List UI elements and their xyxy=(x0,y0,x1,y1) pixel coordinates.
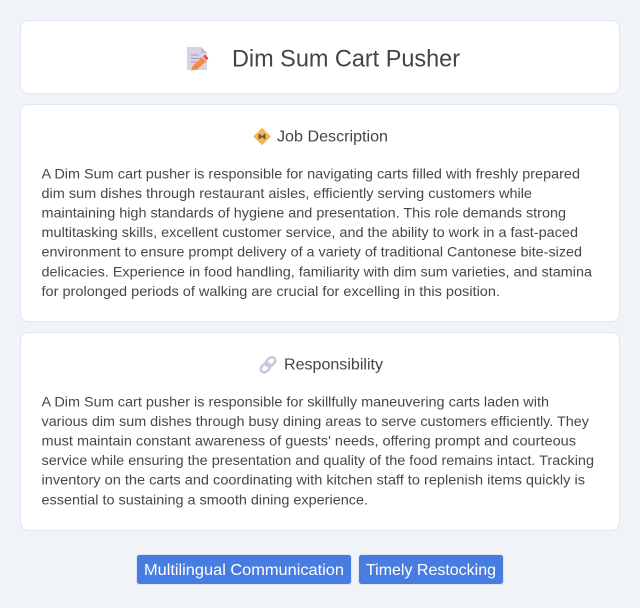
heading: job description: Job Description xyxy=(277,128,388,145)
icon: chain link xyxy=(259,356,277,374)
text block: job description body: A Dim Sum cart pusher is responsible for navigating carts filled with freshly prepared xyxy=(42,165,580,181)
text block: job description body: multitasking skills, excellent customer service, and the ability to work in a fast-paced xyxy=(42,224,578,240)
text block: job description body: delicacies. Experience in food handling, familiarity with dim sum varieties, and stamina xyxy=(42,263,592,279)
text block: responsibility body: must maintain constant awareness of guests' needs, offering prompt and courteous xyxy=(42,432,576,448)
tag: timely restocking: Timely Restocking xyxy=(366,562,496,579)
text block: responsibility body: service while ensuring the presentation and quality of the food remains intact. Tracking xyxy=(42,452,594,468)
icon: document with pencil xyxy=(187,47,208,70)
panel: responsibility xyxy=(20,332,620,530)
tag: timely restocking xyxy=(358,554,504,584)
title: Dim Sum Cart Pusher xyxy=(232,45,460,72)
text block: responsibility body xyxy=(42,393,594,507)
text block: responsibility body: essential to sustaining a smooth dining experience. xyxy=(42,491,368,507)
text block: job description body: environment to ensure prompt delivery of a variety of traditional Cantonese bite-sized xyxy=(42,244,582,260)
text block: job description body: maintaining high standards of hygiene and presentation. This role demands strong xyxy=(42,204,566,220)
panel: job description xyxy=(20,104,620,322)
heading: responsibility: Responsibility xyxy=(284,356,383,373)
text block: responsibility body: inventory on the carts and coordinating with kitchen staff to replenish items quickly is xyxy=(42,472,585,488)
text block: responsibility body: various dim sum dishes through busy dining areas to serve customers efficiently. They xyxy=(42,413,589,429)
icon: orange diamond xyxy=(254,128,270,144)
text block: job description body: for prolonged periods of walking are crucial for excelling in this position. xyxy=(42,283,500,299)
text block: responsibility body: A Dim Sum cart pusher is responsible for skillfully maneuvering carts laden with xyxy=(42,393,549,409)
tag: multilingual communication: Multilingual Communication xyxy=(144,562,344,579)
text block: job description body: dim sum dishes through restaurant aisles, efficiently serving customers while xyxy=(42,185,532,201)
text block: job description body xyxy=(42,165,592,299)
tag: multilingual communication xyxy=(136,554,352,584)
panel: title card xyxy=(20,20,620,94)
